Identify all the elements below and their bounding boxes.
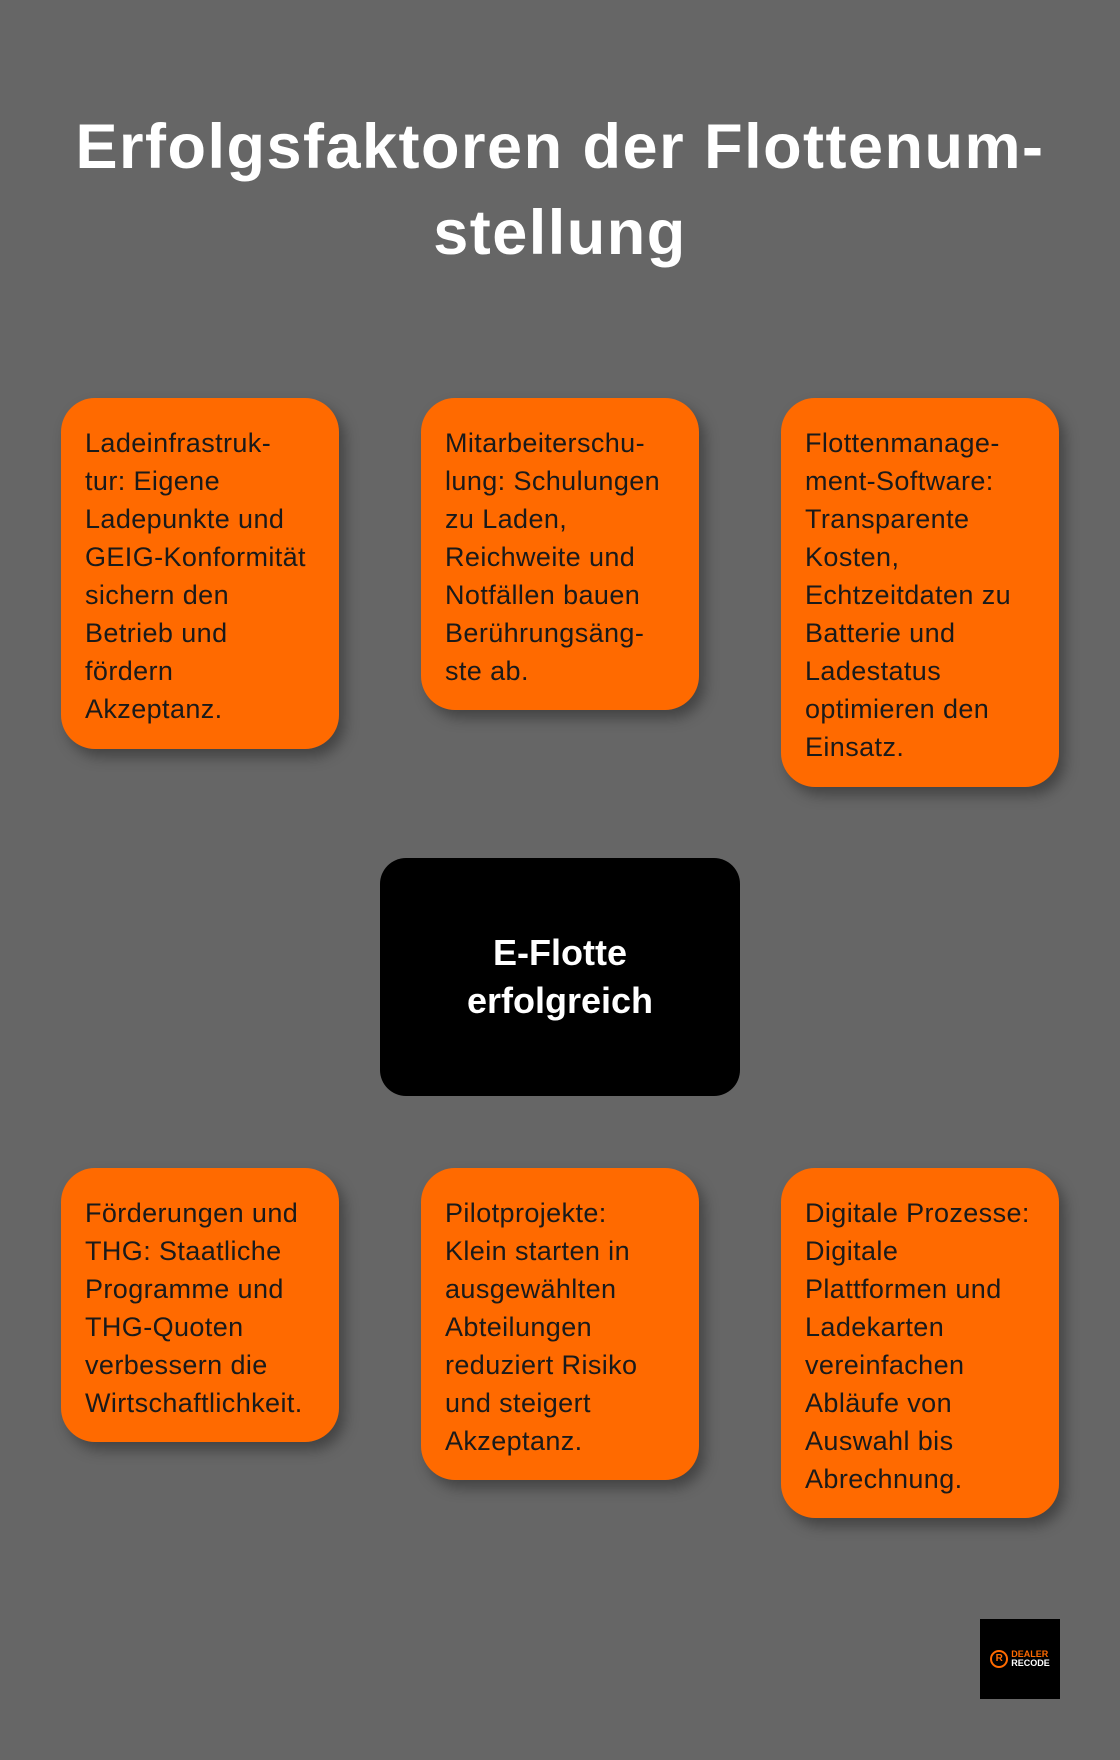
card: Ladeinfrastruktur: Betrieb und [85,618,228,648]
card: Pilotprojekte: und steigert [445,1388,591,1418]
center box [380,858,740,1096]
card: Mitarbeiterschulung: Reichweite und [445,542,635,572]
card: Ladeinfrastruktur [61,398,339,749]
card: Ladeinfrastruktur: Akzeptanz. [85,694,223,724]
card: Pilotprojekte: Pilotprojekte: [445,1198,607,1228]
logo: RECODE [1011,1658,1050,1668]
logo: DEALER [1011,1649,1048,1659]
card: Digitale Prozesse: Plattformen und [805,1274,1002,1304]
card: Förderungen und THG: THG: Staatliche [85,1236,282,1266]
card: Mitarbeiterschulung: Notfällen bauen [445,580,640,610]
card: Pilotprojekte [421,1168,699,1480]
card: Ladeinfrastruktur: fördern [85,656,173,686]
card: Pilotprojekte: Abteilungen [445,1312,592,1342]
card: Mitarbeiterschulung: Berührungsäng- [445,618,644,648]
card: Mitarbeiterschulung [421,398,699,710]
card: Förderungen und THG: verbessern die [85,1350,268,1380]
card: Ladeinfrastruktur: GEIG-Konformität [85,542,306,572]
card: Mitarbeiterschulung: Mitarbeiterschu- [445,428,645,458]
card: Digitale Prozesse: vereinfachen [805,1350,964,1380]
center box: erfolgreich [467,980,653,1021]
card: Förderungen und THG: Programme und [85,1274,284,1304]
card: Digitale Prozesse: Abrechnung. [805,1464,963,1494]
card: Digitale Prozesse: Abläufe von [805,1388,952,1418]
card: Digitale Prozesse: Auswahl bis [805,1426,953,1456]
logo [980,1619,1060,1699]
card: Förderungen und THG: THG-Quoten [85,1312,244,1342]
card: Pilotprojekte: Akzeptanz. [445,1426,583,1456]
card: Ladeinfrastruktur: tur: Eigene [85,466,220,496]
card: Flottenmanagement-Software: optimieren den [805,694,989,724]
card: Flottenmanagement-Software: Batterie und [805,618,955,648]
card: Förderungen und THG [61,1168,339,1442]
card: Förderungen und THG: Wirtschaftlichkeit. [85,1388,303,1418]
card: Flottenmanagement-Software: Einsatz. [805,732,904,762]
card: Mitarbeiterschulung: zu Laden, [445,504,567,534]
card: Flottenmanagement-Software: Flottenmanage- [805,428,1000,458]
title: stellung [433,198,687,268]
card: Ladeinfrastruktur: Ladeinfrastruk- [85,428,271,458]
card: Flottenmanagement-Software: Transparente [805,504,969,534]
card: Flottenmanagement-Software: ment-Software: [805,466,994,496]
card: Flottenmanagement-Software: Kosten, [805,542,899,572]
card: Mitarbeiterschulung: lung: Schulungen [445,466,660,496]
card: Ladeinfrastruktur: Ladepunkte und [85,504,284,534]
card: Mitarbeiterschulung: ste ab. [445,656,529,686]
card: Flottenmanagement-Software [781,398,1059,787]
card: Pilotprojekte: ausgewählten [445,1274,616,1304]
card: Ladeinfrastruktur: sichern den [85,580,229,610]
card: Digitale Prozesse: Ladekarten [805,1312,944,1342]
card: Pilotprojekte: Klein starten in [445,1236,630,1266]
card: Digitale Prozesse: Digitale Prozesse: [805,1198,1030,1228]
title [75,112,1045,268]
card: Digitale Prozesse: Digitale [805,1236,898,1266]
card: Pilotprojekte: reduziert Risiko [445,1350,637,1380]
card: Flottenmanagement-Software: Ladestatus [805,656,941,686]
title: Erfolgsfaktoren der Flottenum- [75,112,1045,182]
card: Förderungen und THG: Förderungen und [85,1198,298,1228]
card: Digitale Prozesse [781,1168,1059,1518]
logo: R [996,1653,1003,1664]
center box: E-Flotte [493,932,627,973]
card: Flottenmanagement-Software: Echtzeitdaten zu [805,580,1011,610]
